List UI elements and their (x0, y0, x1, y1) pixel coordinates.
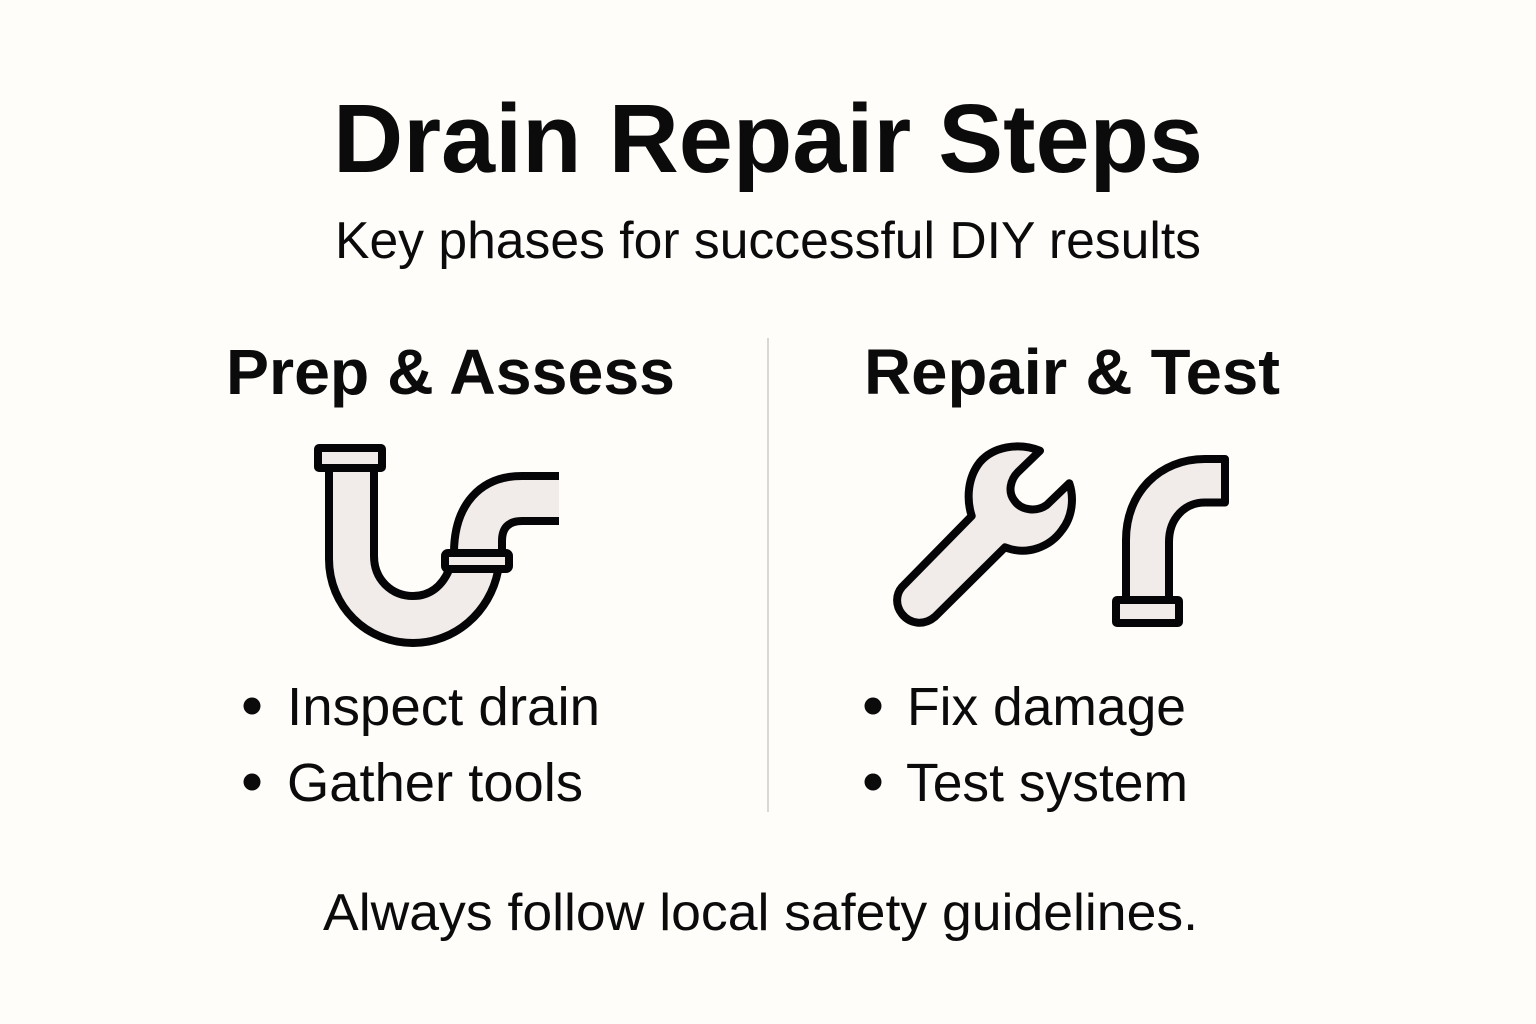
icon: wrench (897, 446, 1072, 623)
bullet: inspect drain: Inspect drain (287, 677, 600, 737)
bullet: gather tools: Gather tools (287, 753, 583, 813)
bullet list: repair and test (864, 677, 1188, 813)
bullet: fix damage: Fix damage (907, 677, 1186, 737)
bullet list: prep and assess (244, 677, 600, 813)
icon: p-trap pipe (318, 448, 559, 643)
bullet: test system: Test system (906, 753, 1188, 813)
subtitle: Key phases for successful DIY results (335, 212, 1201, 270)
heading: prep and assess: Prep & Assess (226, 336, 675, 408)
panel: repair and test (864, 336, 1280, 813)
panel: prep and assess (226, 336, 675, 813)
title: Drain Repair Steps (333, 84, 1203, 193)
centre divider (767, 338, 769, 812)
icon: elbow pipe (1116, 459, 1225, 623)
heading: repair and test: Repair & Test (864, 336, 1280, 408)
footer note: Always follow local safety guidelines. (323, 884, 1198, 942)
